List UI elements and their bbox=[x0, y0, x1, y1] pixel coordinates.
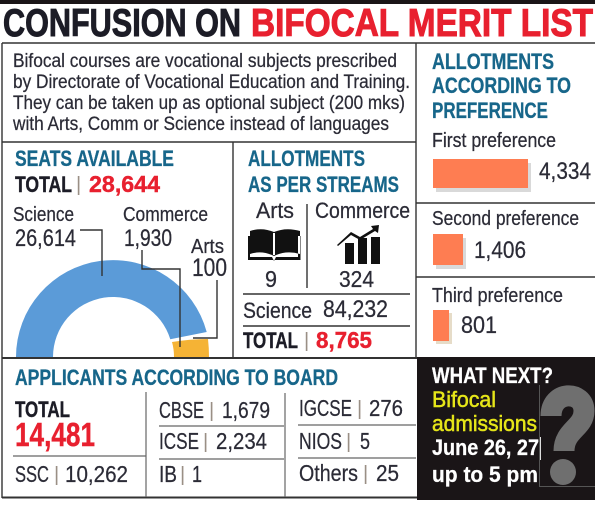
applicants total: 14,481 bbox=[15, 416, 95, 453]
IGCSE: 276 bbox=[369, 395, 403, 421]
SSC: SSC bbox=[15, 461, 49, 487]
intro text: by Directorate of Vocational Education and Training. bbox=[13, 72, 410, 93]
what next text bbox=[432, 363, 553, 487]
what next text: Bifocal bbox=[432, 387, 496, 412]
streams total bbox=[243, 327, 372, 353]
semi-donut chart bbox=[16, 260, 209, 357]
streams total: 8,765 bbox=[316, 327, 372, 353]
ICSE: | bbox=[203, 431, 208, 453]
preference heading: ALLOTMENTS bbox=[432, 49, 554, 74]
seats heading: SEATS AVAILABLE bbox=[15, 146, 174, 171]
science stream: Science bbox=[243, 298, 312, 323]
seats total bbox=[15, 171, 160, 197]
icon: book bbox=[248, 229, 300, 261]
preference heading: ACCORDING TO bbox=[432, 73, 571, 98]
arts stream: Arts bbox=[256, 198, 294, 223]
title: CONFUSION ON bbox=[3, 2, 241, 45]
science stream: 84,232 bbox=[323, 296, 388, 323]
streams heading bbox=[248, 146, 399, 197]
SSC: | bbox=[54, 464, 59, 486]
science label bbox=[13, 204, 102, 276]
streams total: | bbox=[304, 330, 309, 352]
intro text: They can be taken up as optional subject (200 mks) bbox=[13, 93, 405, 114]
applicants total bbox=[15, 397, 95, 453]
panel: seats available bbox=[13, 146, 227, 357]
IGCSE bbox=[299, 395, 403, 421]
NIOS: NIOS bbox=[299, 428, 342, 454]
science stream bbox=[243, 296, 388, 323]
arts stream bbox=[248, 198, 300, 292]
third preference bar bbox=[432, 285, 563, 344]
panel: applicants by board bbox=[13, 365, 416, 497]
commerce label: 1,930 bbox=[124, 225, 172, 252]
commerce label bbox=[123, 204, 208, 347]
title bbox=[3, 2, 593, 45]
Others: Others bbox=[299, 460, 358, 486]
what next text: WHAT NEXT? bbox=[432, 363, 553, 388]
icon: bar chart with arrow bbox=[337, 225, 380, 264]
NIOS: 5 bbox=[360, 428, 370, 454]
third preference bar: Third preference bbox=[432, 285, 563, 307]
preference heading bbox=[432, 49, 571, 123]
commerce label: Commerce bbox=[123, 204, 208, 226]
what next text: admissions bbox=[432, 411, 537, 436]
preference heading: PREFERENCE bbox=[432, 98, 548, 123]
panel: allotments by preference bbox=[432, 49, 591, 344]
seats total: 28,644 bbox=[89, 171, 160, 197]
commerce stream: 324 bbox=[339, 266, 374, 292]
streams heading: ALLOTMENTS bbox=[248, 146, 365, 171]
IB: 1 bbox=[192, 461, 202, 487]
Others bbox=[299, 460, 399, 486]
intro text: Bifocal courses are vocational subjects prescribed bbox=[13, 51, 397, 72]
IB bbox=[159, 461, 202, 487]
Others: | bbox=[363, 463, 368, 485]
panel: what next bbox=[417, 357, 595, 500]
applicants heading: APPLICANTS ACCORDING TO BOARD bbox=[15, 365, 338, 390]
arts stream: 9 bbox=[265, 266, 277, 292]
icon: question mark bbox=[540, 385, 595, 486]
arts label: 100 bbox=[192, 254, 227, 282]
IB: IB bbox=[159, 461, 177, 487]
intro text bbox=[12, 51, 410, 135]
first preference bar: 4,334 bbox=[539, 158, 591, 185]
NIOS: | bbox=[346, 431, 351, 453]
seats total: TOTAL bbox=[15, 172, 72, 197]
streams heading: AS PER STREAMS bbox=[248, 172, 399, 197]
first preference bar: First preference bbox=[432, 130, 556, 152]
what next text: up to 5 pm bbox=[432, 462, 538, 487]
IGCSE: IGCSE bbox=[299, 395, 352, 421]
SSC: 10,262 bbox=[65, 461, 128, 487]
seats total: | bbox=[76, 174, 81, 196]
second preference bar bbox=[432, 208, 579, 269]
science label: Science bbox=[13, 204, 74, 226]
ICSE: ICSE bbox=[159, 428, 199, 454]
applicants total: TOTAL bbox=[15, 397, 70, 422]
commerce stream: Commerce bbox=[315, 198, 410, 223]
CBSE: | bbox=[209, 400, 214, 422]
second preference bar: 1,406 bbox=[474, 237, 526, 264]
IB: | bbox=[180, 464, 185, 486]
CBSE: CBSE bbox=[159, 397, 204, 423]
streams total: TOTAL bbox=[243, 328, 298, 353]
science label: 26,614 bbox=[15, 225, 76, 252]
second preference bar: Second preference bbox=[432, 208, 579, 230]
arts label: Arts bbox=[191, 236, 224, 258]
third preference bar: 801 bbox=[461, 312, 497, 339]
SSC bbox=[15, 461, 128, 487]
CBSE bbox=[159, 397, 270, 423]
IGCSE: | bbox=[357, 398, 362, 420]
commerce stream bbox=[315, 198, 410, 292]
panel: allotments per streams bbox=[243, 146, 410, 353]
ICSE bbox=[159, 428, 267, 454]
first preference bar bbox=[432, 130, 591, 192]
what next text: June 26, 27 bbox=[432, 435, 539, 460]
ICSE: 2,234 bbox=[216, 428, 267, 454]
arts label bbox=[191, 236, 227, 338]
intro text: with Arts, Comm or Science instead of languages bbox=[12, 114, 389, 135]
Others: 25 bbox=[376, 460, 399, 486]
CBSE: 1,679 bbox=[222, 397, 270, 423]
